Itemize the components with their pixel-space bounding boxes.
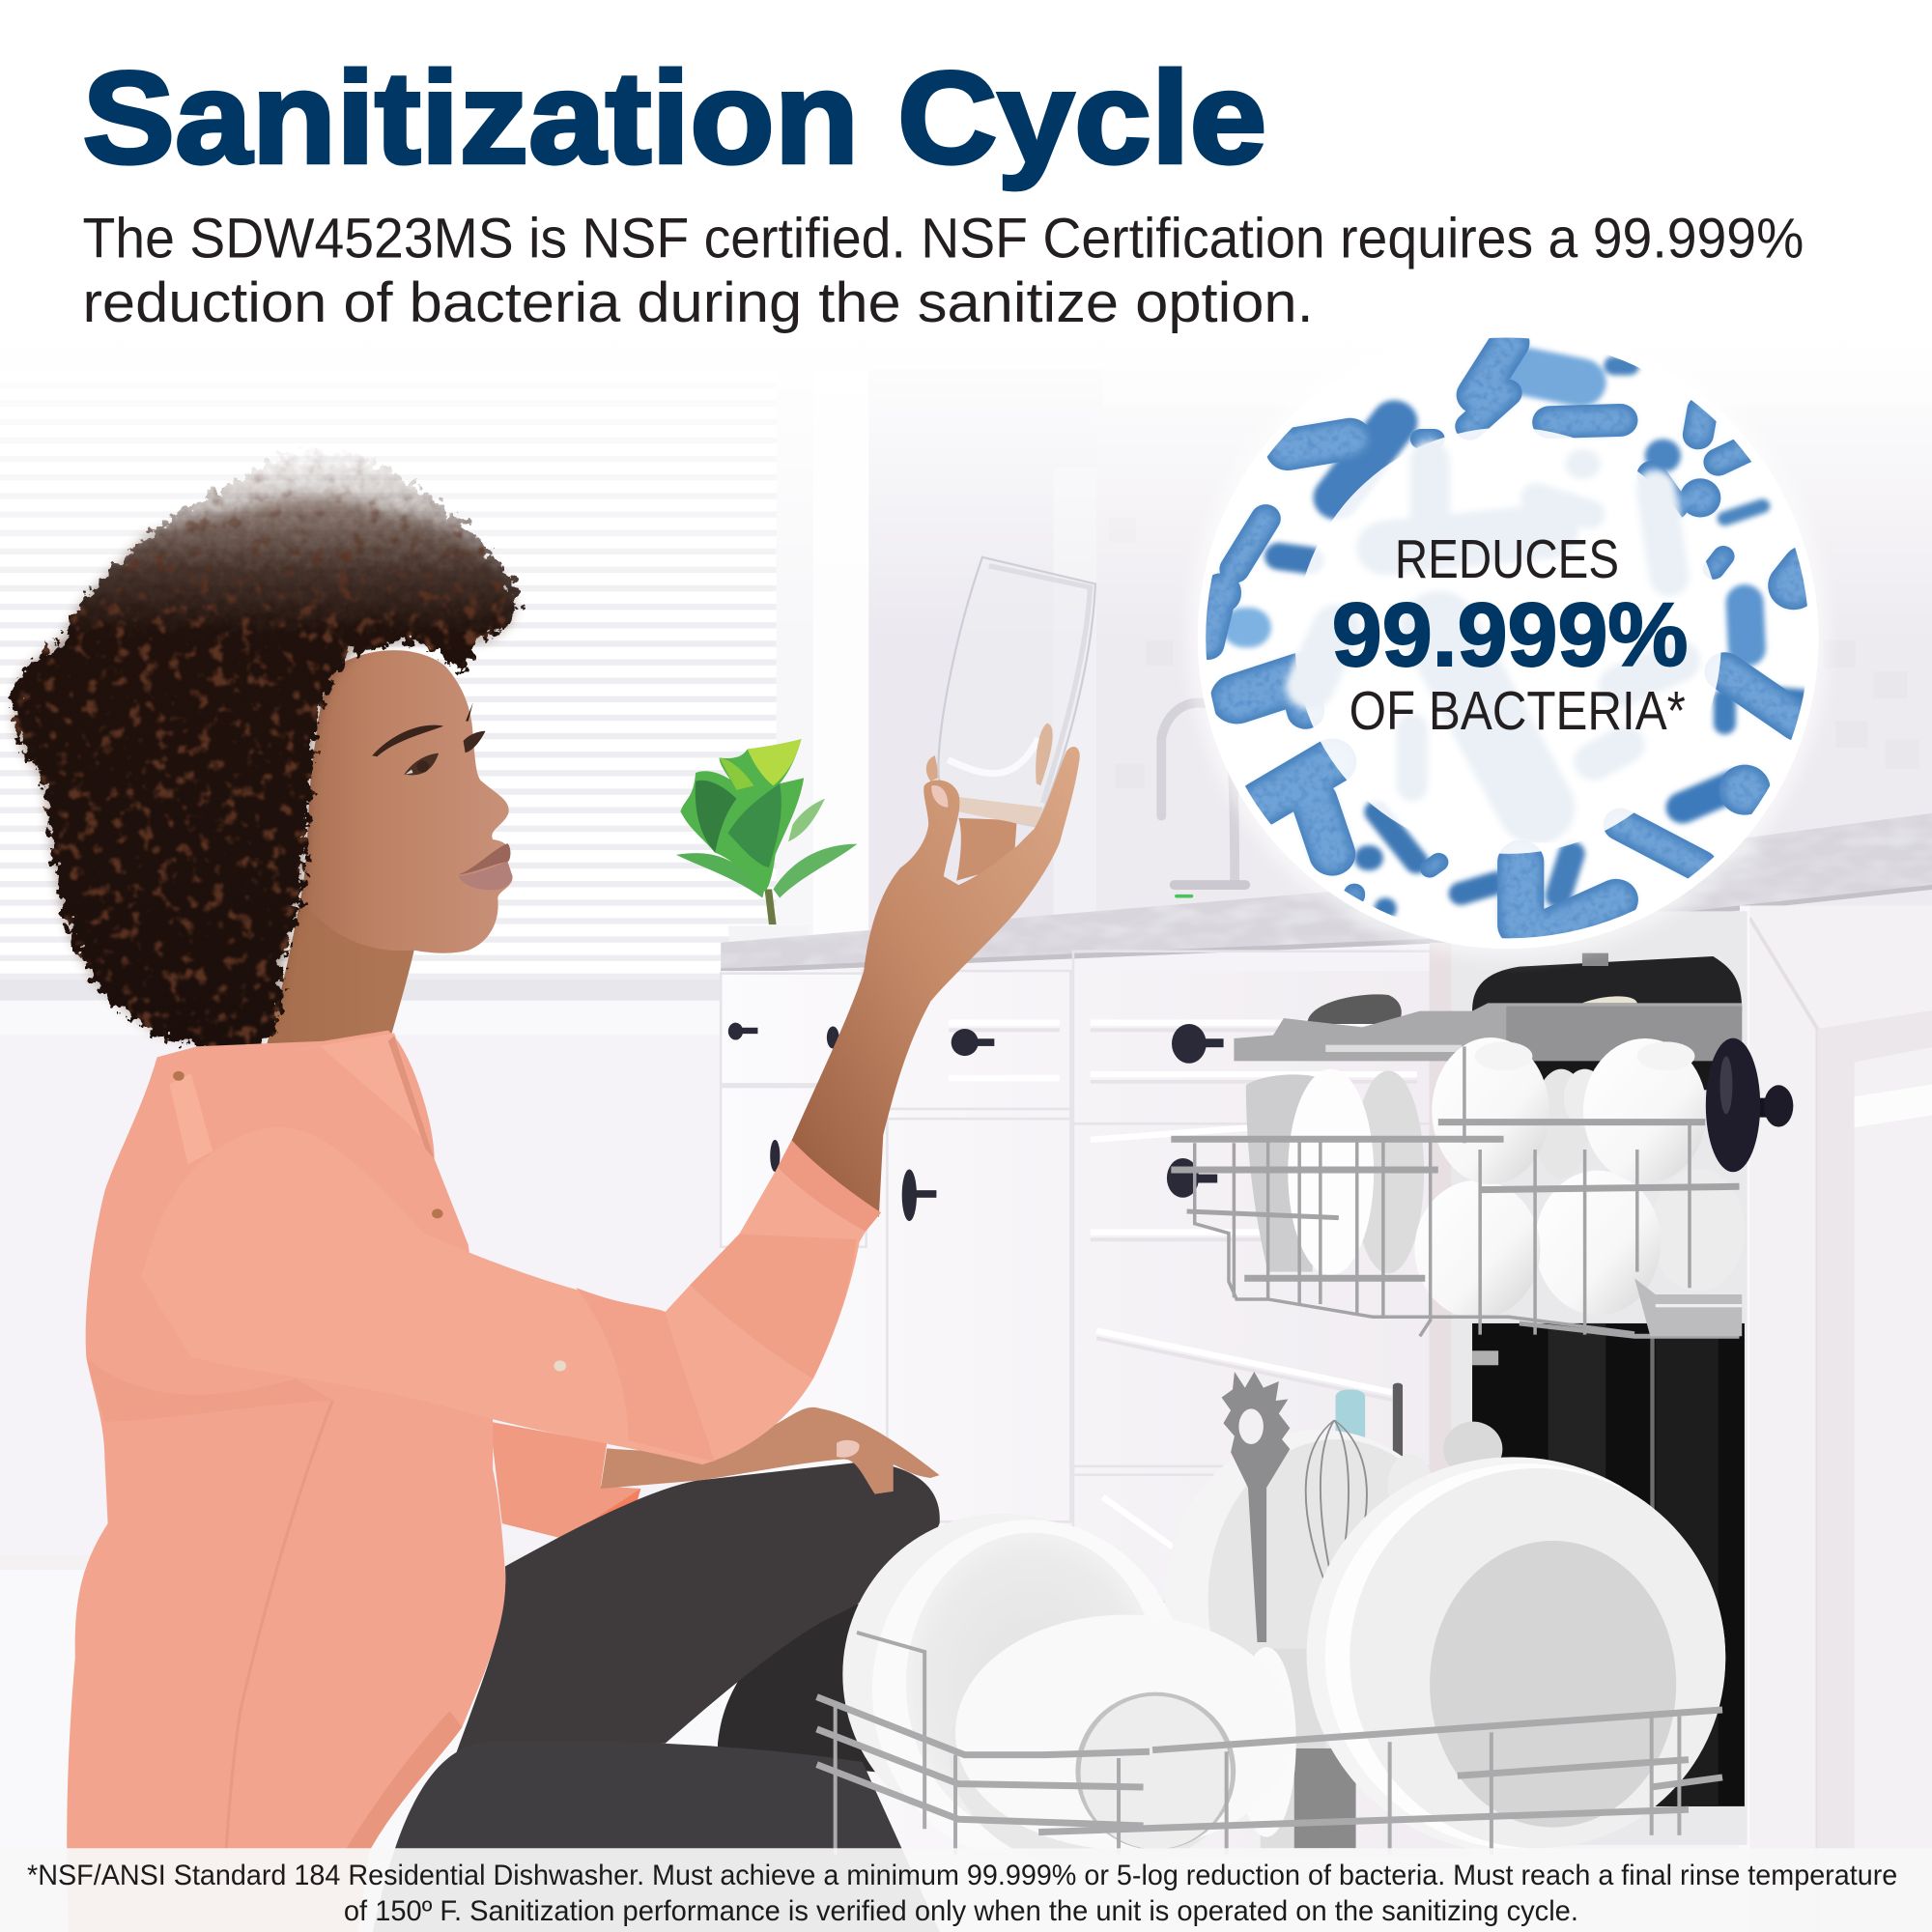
kitchen counter bbox=[721, 813, 1932, 974]
woman bbox=[13, 448, 1095, 1932]
lips bbox=[458, 843, 510, 875]
window with blinds bbox=[0, 370, 779, 1035]
icon: potted plant bbox=[676, 739, 858, 946]
rack wires bbox=[1171, 1046, 1740, 1336]
back plates bbox=[1165, 1430, 1473, 1765]
fingers behind glass bbox=[956, 818, 1017, 881]
eyes bbox=[404, 753, 439, 775]
lower body bbox=[67, 1031, 961, 1932]
footnote text bbox=[27, 1860, 1897, 1927]
mosaic backsplash bbox=[1096, 407, 1932, 924]
bacteria illustration bbox=[1208, 343, 1806, 938]
big door knob bbox=[1706, 1038, 1793, 1172]
inner translucent disc bbox=[1295, 428, 1721, 854]
utensils bbox=[1165, 1372, 1502, 1765]
hair back and neck bbox=[13, 448, 518, 1145]
trousers: lower leg bbox=[363, 1741, 961, 1932]
subtitle bbox=[82, 208, 1804, 334]
rack wires bbox=[817, 1633, 1722, 1855]
whisk bbox=[1306, 1420, 1367, 1591]
sleeve button bbox=[554, 1360, 566, 1372]
hair bbox=[13, 448, 518, 1062]
callout text: 99.999% bbox=[1332, 584, 1688, 685]
hair glow bbox=[14, 497, 513, 1046]
cutlery basket bbox=[1261, 1649, 1325, 1848]
plates bbox=[1352, 1070, 1424, 1273]
dishwasher interior bbox=[1451, 911, 1747, 1845]
right cabinet door bbox=[1740, 906, 1932, 1932]
large front plates bbox=[1307, 1457, 1719, 1853]
in focus bacteria bbox=[1208, 343, 1806, 938]
front bowl stack bbox=[1236, 1647, 1296, 1837]
rear sleeve bbox=[490, 1422, 640, 1540]
footnote text: *NSF/ANSI Standard 184 Residential Dishwasher. Must achieve a minimum 99.999% or 5-log reduction of bacteria. Must reach a final rinse temperature bbox=[27, 1860, 1897, 1891]
forearm and hand bbox=[788, 747, 1080, 1217]
blouse sleeve bbox=[142, 1127, 881, 1464]
cabinet knobs bbox=[728, 1023, 1224, 1221]
glass bbox=[938, 557, 1095, 826]
dishwasher upper rack bbox=[1171, 994, 1793, 1336]
bowls bbox=[1532, 1069, 1590, 1179]
raised forearm and hand bbox=[788, 557, 1095, 1217]
drinking glass bbox=[1246, 1074, 1316, 1272]
callout text: OF BACTERIA* bbox=[1350, 680, 1686, 741]
icon: faucet bbox=[1161, 703, 1245, 896]
lower hand on knee bbox=[601, 1407, 940, 1494]
trousers: calf bbox=[718, 1604, 912, 1776]
cabinet drawer fronts bbox=[721, 952, 1443, 1602]
spatula bbox=[1336, 1389, 1365, 1521]
title: Sanitization Cycle bbox=[82, 44, 1266, 190]
trousers: thigh bbox=[456, 1462, 940, 1754]
floor bbox=[0, 1565, 727, 1932]
footnote text: of 150º F. Sanitization performance is verified only when the unit is operated on the sanitizing cycle. bbox=[344, 1895, 1578, 1927]
neck and face bbox=[267, 650, 513, 1145]
footnote band bbox=[0, 1848, 1932, 1932]
left plates bbox=[842, 1514, 1160, 1835]
cutlery tray bbox=[1234, 994, 1742, 1090]
callout text bbox=[1332, 528, 1688, 741]
subtitle: The SDW4523MS is NSF certified. NSF Certification requires a 99.999% bbox=[82, 208, 1804, 270]
bacteria callout circle bbox=[1188, 318, 1829, 958]
cabinets bbox=[721, 943, 1472, 1858]
subtitle: reduction of bacteria during the sanitize option. bbox=[82, 271, 1314, 334]
callout text: REDUCES bbox=[1395, 528, 1619, 589]
spaghetti spoon bbox=[1222, 1372, 1290, 1642]
eyebrow bbox=[372, 725, 443, 756]
dishwasher lower rack bbox=[817, 1372, 1725, 1871]
out of focus bacteria bbox=[1243, 366, 1803, 909]
blouse body bbox=[67, 1031, 505, 1932]
